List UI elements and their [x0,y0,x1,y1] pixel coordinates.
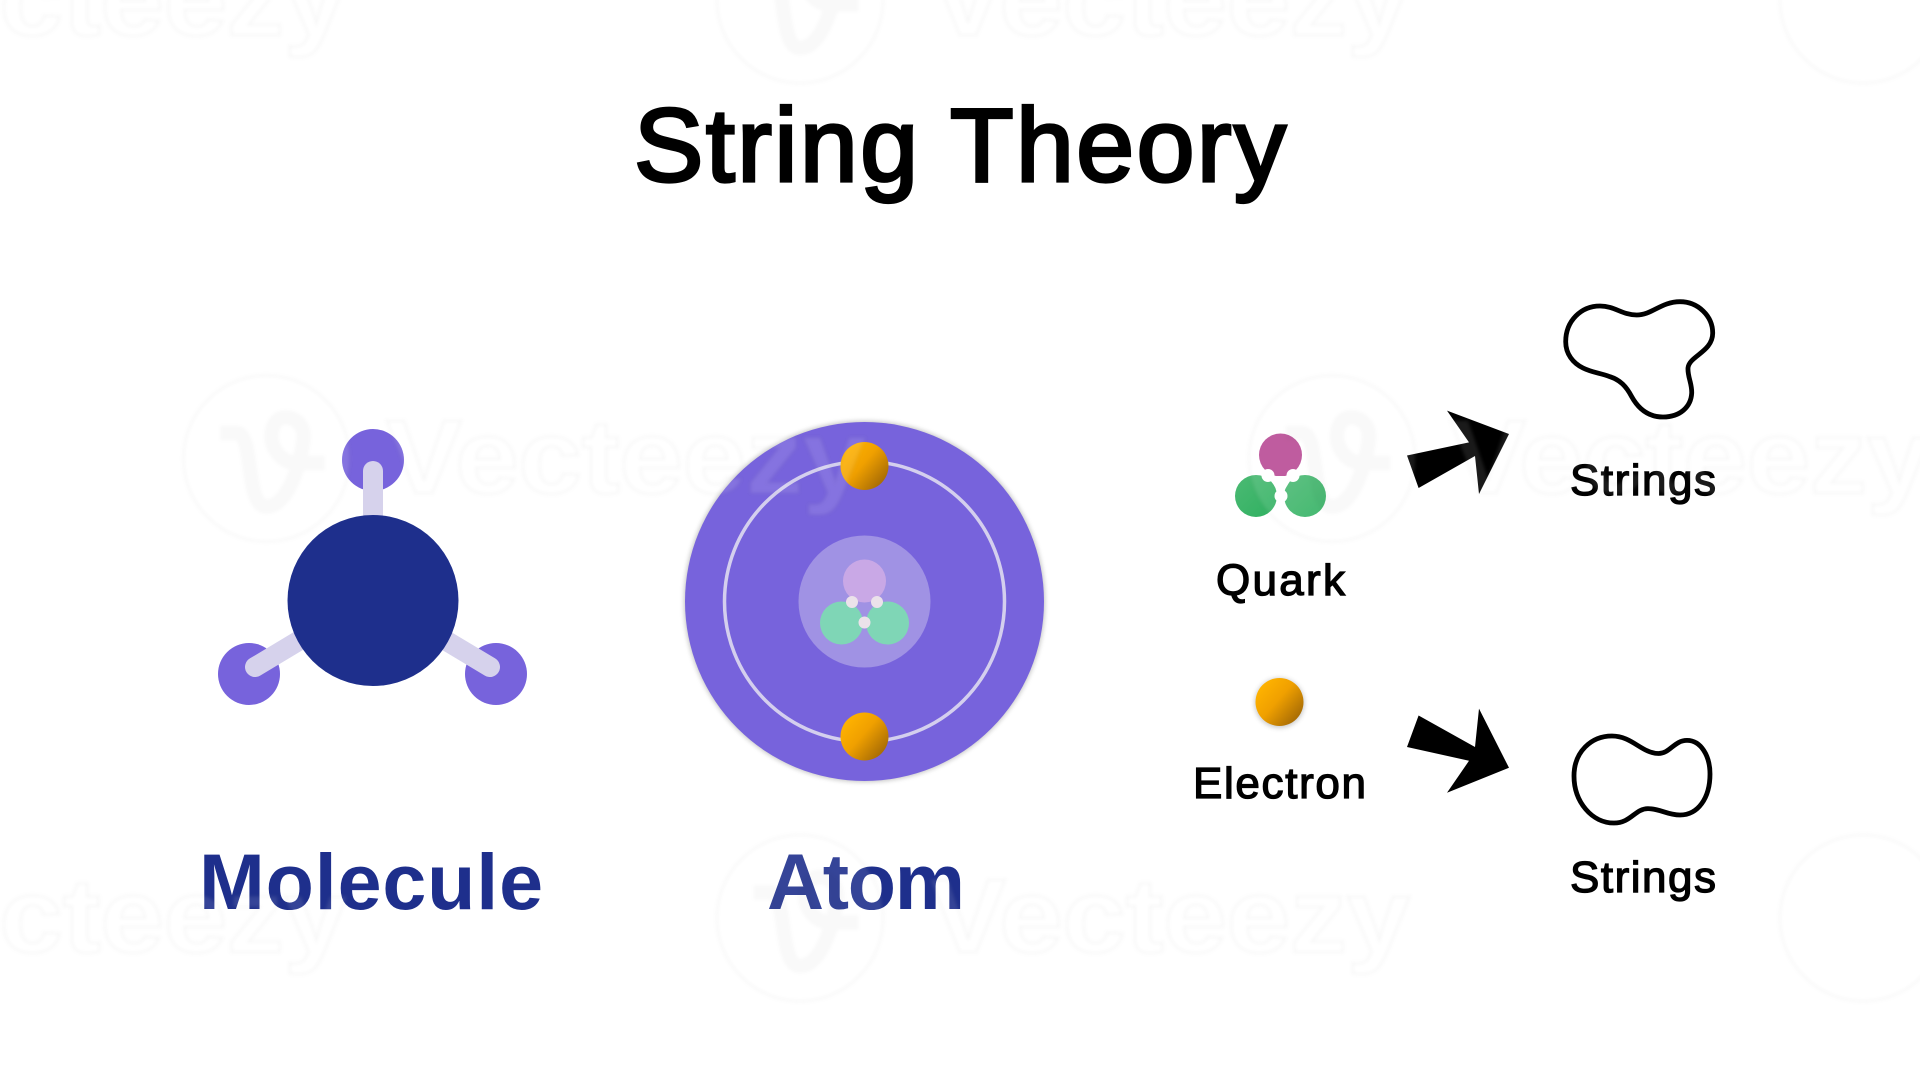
lower strings label: Strings [1570,853,1716,902]
title: String Theory [634,88,1286,204]
watermark overlay: Vecteezy [1450,399,1920,516]
closed string shape, lower [1574,736,1710,823]
molecule label: Molecule [199,837,543,926]
watermark overlay: Vecteezy [930,858,1410,975]
watermark overlay: Vecteezy [386,399,866,516]
arrow: quark to strings [1407,411,1509,494]
arrow: electron to strings [1407,709,1509,793]
electron label: Electron [1193,759,1366,808]
electron icon [1254,678,1304,728]
quark label: Quark [1216,556,1346,605]
atom label: Atom [767,837,965,926]
molecule illustration [218,429,527,705]
quark icon [1235,434,1326,517]
atom illustration [684,421,1045,782]
upper strings label: Strings [1570,456,1716,505]
closed string shape, upper [1566,302,1713,417]
